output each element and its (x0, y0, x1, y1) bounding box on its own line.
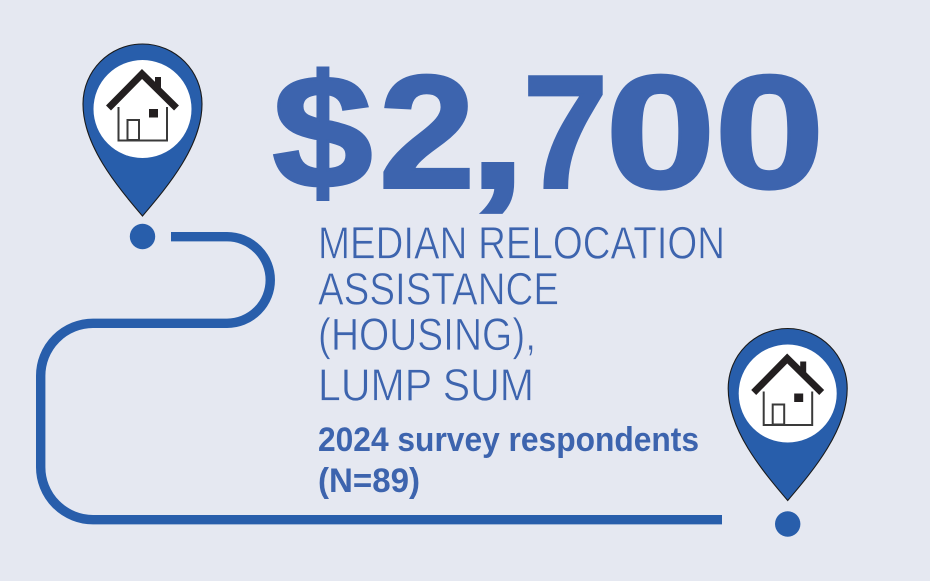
headline figure: 0 (606, 42, 716, 222)
description text: (HOUSING), (318, 309, 536, 360)
headline figure: 0 (714, 42, 824, 222)
icon: start location pin with house (83, 44, 202, 216)
end point dot (775, 511, 800, 537)
headline figure: $ (272, 42, 372, 222)
headline figure (272, 42, 824, 222)
headline figure: 7 (523, 42, 608, 222)
description text: ASSISTANCE (318, 264, 559, 314)
survey note: (N=89) (318, 462, 420, 500)
description text (318, 218, 725, 410)
headline figure: 2 (379, 42, 475, 222)
survey note: 2024 survey respondents (318, 421, 699, 459)
description text: MEDIAN RELOCATION (318, 218, 725, 268)
icon: destination location pin with house (728, 328, 847, 500)
headline figure: , (469, 42, 526, 222)
route line between the two pins (41, 237, 722, 520)
survey note (318, 421, 699, 500)
start point dot (130, 224, 155, 249)
description text: LUMP SUM (318, 360, 534, 410)
